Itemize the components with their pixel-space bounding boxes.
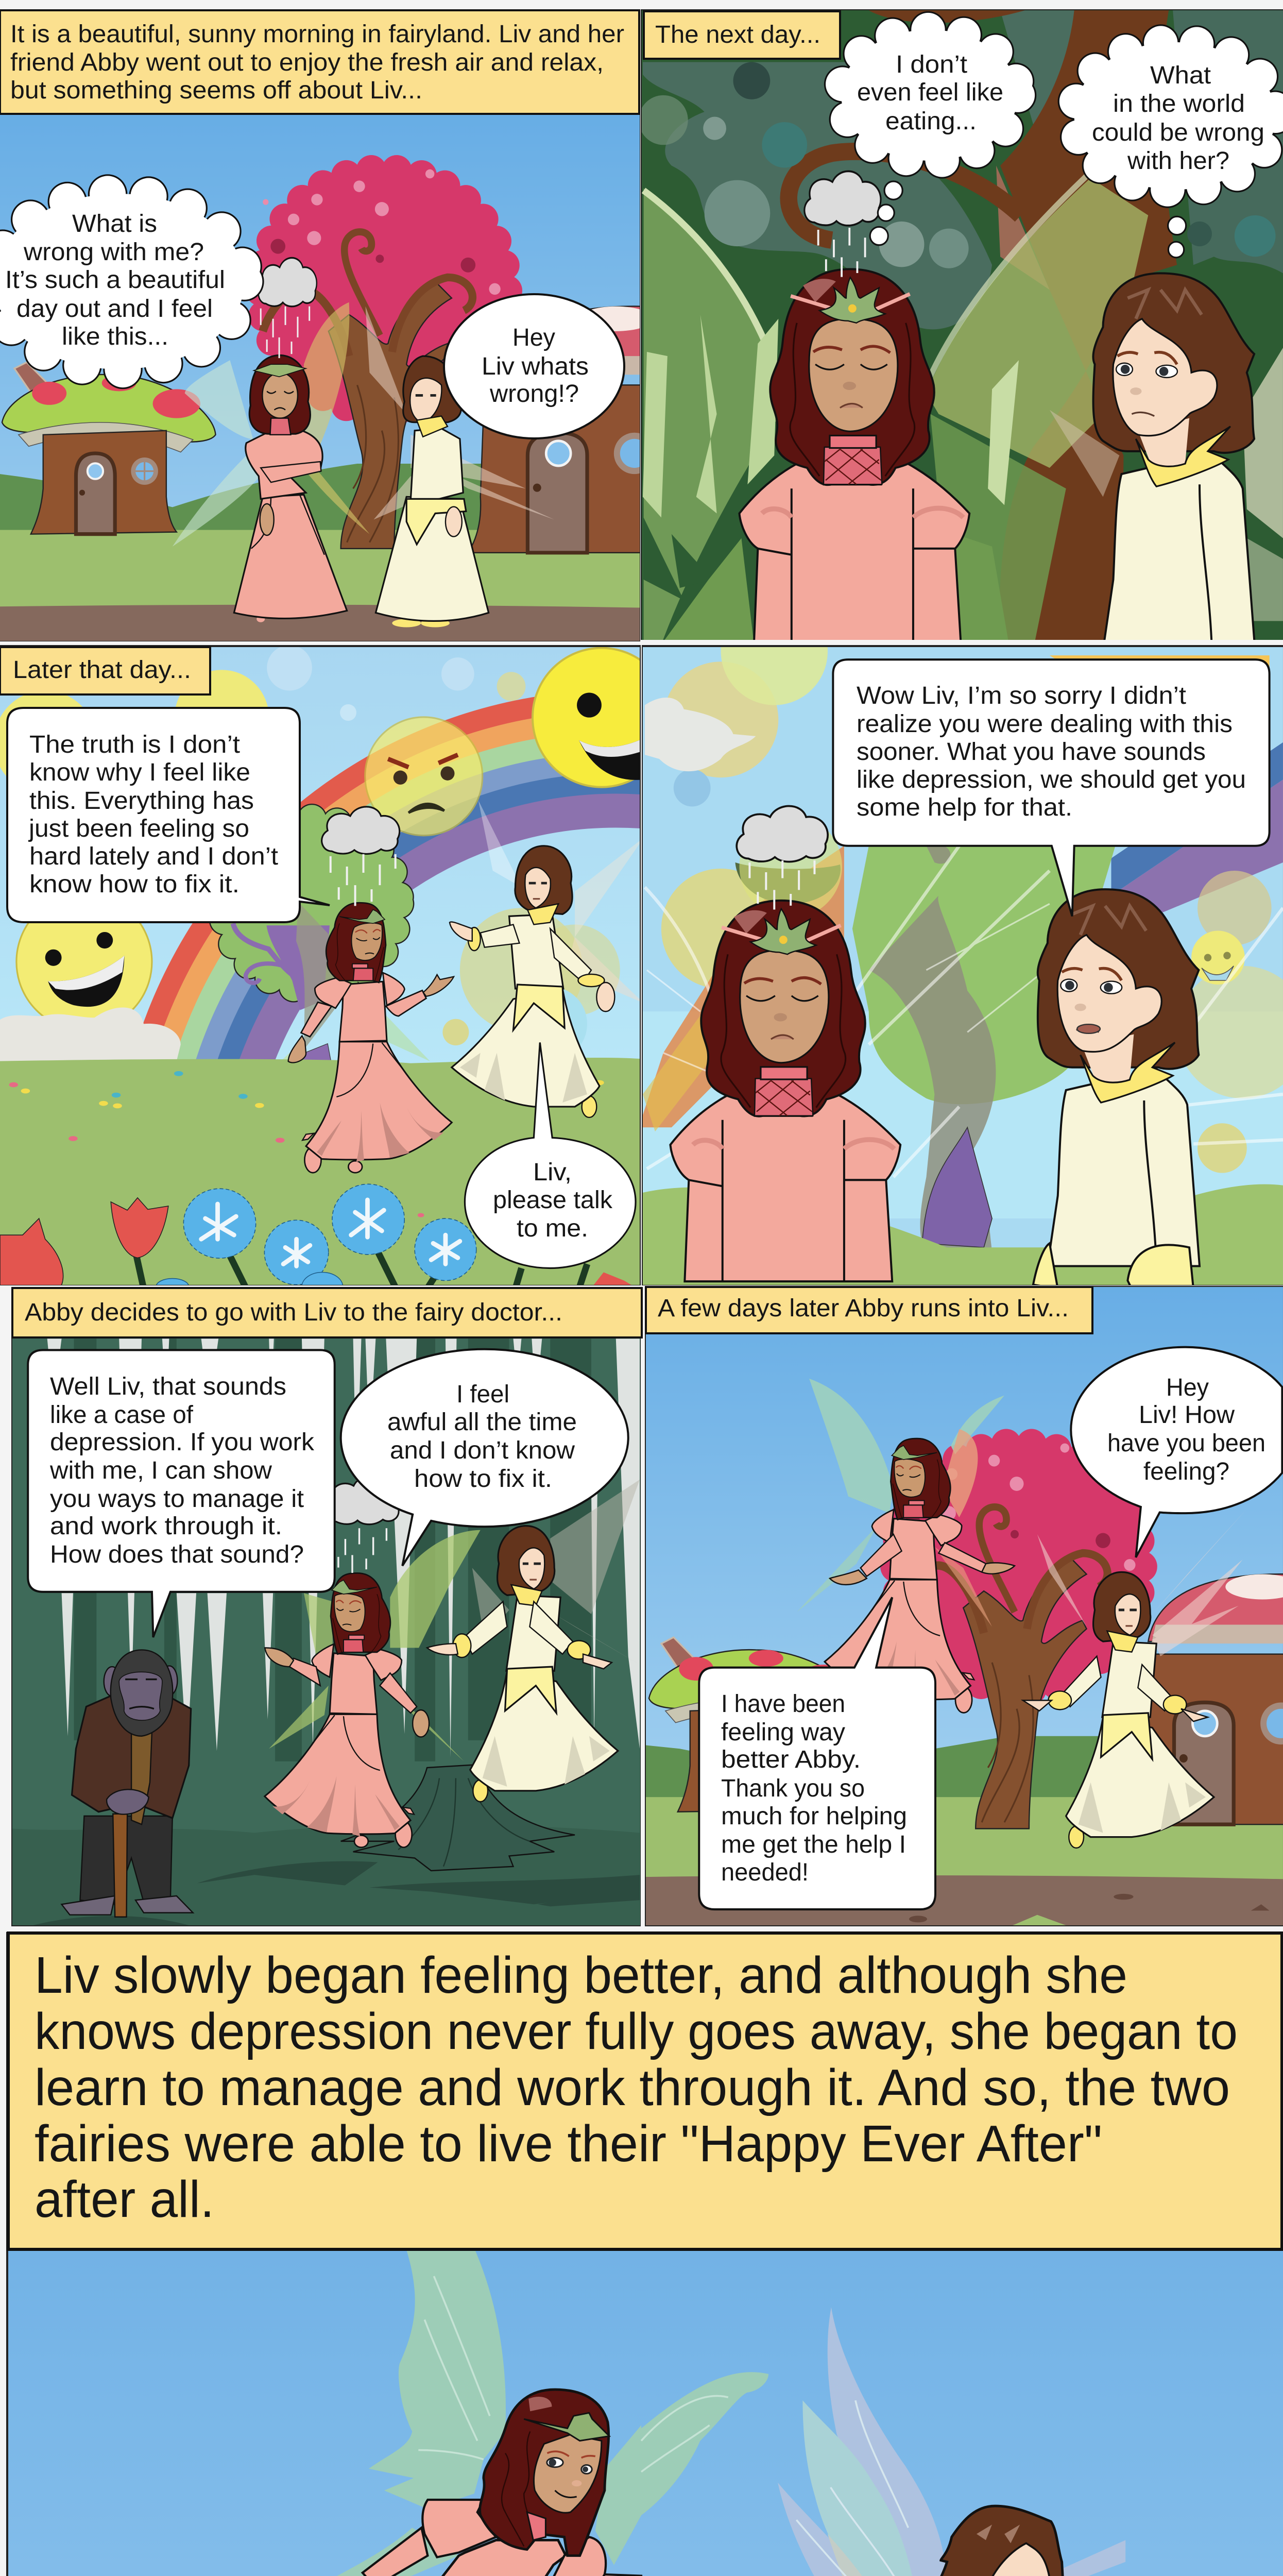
panel 5: fairy doctor <box>0 1278 644 1937</box>
wings: Abby final <box>675 2307 1125 2576</box>
doctor: old ape with cane <box>62 1650 193 1917</box>
caption: ending narration <box>8 1933 1282 2249</box>
thought bubble: Liv not eating: eating... <box>885 108 977 135</box>
speech box: doctor: depression. If you work <box>50 1429 315 1456</box>
flowers <box>0 1184 637 1301</box>
wings: Liv panel 6 <box>797 1379 1004 1627</box>
thought bubble: Liv: wrong with me? <box>23 239 204 266</box>
speech box: doctor: you ways to manage it <box>50 1485 304 1513</box>
figure: Liv floating panel 3 <box>288 903 454 1173</box>
speech box: doctor: like a case of <box>50 1401 194 1429</box>
speech box: doctor <box>28 1350 335 1637</box>
thought bubble: Liv: like this... <box>62 323 168 350</box>
thought bubble: Abby wondering: with her? <box>1127 147 1229 175</box>
speech box: Liv explains <box>7 708 330 922</box>
thought bubble: Liv not eating: I don’t <box>896 51 967 78</box>
speech bubble: Abby asks: Hey <box>1166 1374 1209 1401</box>
speech box: Liv thanks Abby: needed! <box>721 1859 809 1886</box>
figure: Abby floating panel 3 <box>450 800 644 1117</box>
panel 7: happy ending <box>6 1932 1283 2576</box>
speech box: Abby realizes: sooner. What you have sounds <box>857 738 1206 766</box>
wing: Liv right final <box>641 2372 768 2515</box>
wings: Abby panel 2 <box>1050 348 1283 621</box>
panel 4: Abby responds <box>639 598 1283 1289</box>
figure: Abby floating panel 5 <box>427 1480 640 1802</box>
caption: ending narration: after all. <box>35 2171 214 2228</box>
speech box: Liv explains: know why I feel like <box>29 759 250 786</box>
caption: The next day <box>644 11 840 59</box>
speech box: Abby realizes <box>833 659 1270 916</box>
speech bubble: Abby asks: have you been <box>1107 1430 1265 1457</box>
thought bubble: Liv: It’s such a beautiful <box>5 266 225 294</box>
speech box: Liv thanks Abby <box>699 1597 935 1909</box>
caption: Later that day: Later that day... <box>13 656 191 684</box>
thought bubble: Abby wondering: What <box>1150 62 1211 89</box>
speech bubble: Abby <box>444 294 624 438</box>
figure: Liv standing <box>173 302 369 622</box>
rain cloud: panel 2 <box>805 171 881 277</box>
figure: Abby standing <box>366 307 554 627</box>
caption: a few days later: A few days later Abby runs into Liv... <box>658 1295 1069 1322</box>
speech box: Abby realizes: some help for that. <box>857 794 1072 821</box>
caption: ending narration: fairies were able to live their "Happy Ever After" <box>35 2115 1102 2173</box>
rain cloud: panel 3 <box>322 807 400 906</box>
speech bubble: Liv feels awful: how to fix it. <box>414 1465 552 1493</box>
speech bubble: Liv feels awful: and I don’t know <box>390 1437 575 1464</box>
speech bubble: Abby: Hey <box>512 324 555 351</box>
figure: Liv floating panel 5 <box>265 1530 481 1848</box>
speech box: Liv thanks Abby: Thank you so <box>721 1775 865 1802</box>
caption: opening narration: but something seems off about Liv... <box>10 77 422 104</box>
figure: Liv close-up panel 4 <box>670 901 900 1281</box>
thought bubble: Liv not eating <box>841 30 1018 245</box>
panel 2: the next day <box>639 0 1283 650</box>
caption: ending narration: learn to manage and work through it. And so, the two <box>35 2059 1230 2116</box>
figure: Abby final <box>710 2506 1185 2576</box>
caption: The next day: The next day... <box>655 21 820 48</box>
figure: Abby close-up <box>1093 273 1255 650</box>
speech box: doctor: with me, I can show <box>49 1457 272 1484</box>
wings overlay: panel 4 <box>645 846 1283 1177</box>
caption: doctor visit: Abby decides to go with Liv to the fairy doctor... <box>25 1299 562 1326</box>
speech bubble: Abby: Liv whats <box>482 353 589 380</box>
speech box: doctor: Well Liv, that sounds <box>50 1373 286 1400</box>
speech bubble: Liv feels awful: awful all the time <box>387 1409 577 1436</box>
speech bubble: Abby: wrong!? <box>489 380 579 408</box>
speech box: Liv thanks Abby: better Abby. <box>721 1746 861 1773</box>
thought bubble: Liv not eating: even feel like <box>857 79 1003 106</box>
figure: Liv final <box>229 2389 641 2576</box>
wings: Liv panel 2 <box>643 176 1148 650</box>
wings: Liv final <box>220 2248 641 2576</box>
caption: a few days later <box>646 1287 1092 1333</box>
speech bubble: Abby asks: Liv! How <box>1139 1401 1235 1429</box>
speech box: doctor: and work through it. <box>50 1513 282 1540</box>
speech box: Liv explains: just been feeling so <box>28 815 249 842</box>
speech bubble: Liv feels awful <box>341 1349 628 1566</box>
speech bubble: Abby please talk: please talk <box>493 1187 613 1214</box>
speech bubble: Abby asks <box>1071 1347 1282 1557</box>
speech box: Liv thanks Abby: me get the help I <box>721 1831 906 1858</box>
rain cloud: panel 5 <box>327 1477 400 1573</box>
thought bubble: Liv <box>0 194 244 369</box>
speech bubble: Abby please talk: to me. <box>517 1215 588 1242</box>
thought bubble: Abby wondering <box>1074 42 1276 258</box>
figure: Abby floating panel 6 <box>1023 1509 1247 1848</box>
speech box: Liv explains: know how to fix it. <box>29 871 240 898</box>
speech box: Liv thanks Abby: much for helping <box>721 1803 907 1830</box>
caption: ending narration: Liv slowly began feeling better, and although she <box>35 1946 1127 2004</box>
caption: ending narration: knows depression never fully goes away, she began to <box>35 2003 1238 2060</box>
rain cloud: panel 1 <box>259 258 317 358</box>
speech box: Abby realizes: like depression, we should get you <box>857 766 1246 793</box>
speech bubble: Liv feels awful: I feel <box>456 1381 509 1408</box>
panel 1: sunny morning <box>0 9 655 650</box>
speech box: Liv explains: hard lately and I don’t <box>29 843 278 870</box>
rain cloud: panel 4 <box>737 806 828 910</box>
panel 3: later that day <box>0 639 1108 1694</box>
speech bubble: Abby asks: feeling? <box>1143 1458 1229 1485</box>
speech box: Liv explains: The truth is I don’t <box>29 731 240 758</box>
speech box: Abby realizes: Wow Liv, I’m so sorry I didn’t <box>857 682 1186 709</box>
thought bubble: Abby wondering: could be wrong <box>1092 119 1264 146</box>
speech box: doctor: How does that sound? <box>50 1541 304 1568</box>
panel 6: a few days later <box>639 1278 1283 1937</box>
thought bubble: Abby wondering: in the world <box>1113 90 1245 117</box>
speech box: Liv thanks Abby: feeling way <box>721 1719 845 1746</box>
speech box: Abby realizes: realize you were dealing with this <box>857 710 1233 738</box>
figure: Abby close-up panel 4 <box>1033 889 1200 1289</box>
caption: doctor visit <box>12 1288 642 1337</box>
speech bubble: Abby please talk: Liv, <box>533 1159 572 1186</box>
figure: Liv close-up <box>739 269 969 650</box>
speech box: Liv thanks Abby: I have been <box>721 1690 845 1718</box>
speech bubble: Abby please talk <box>465 1043 636 1268</box>
caption: Later that day <box>0 647 210 694</box>
thought bubble: Liv: What is <box>72 210 157 238</box>
caption: opening narration: friend Abby went out to enjoy the fresh air and relax, <box>10 49 604 76</box>
speech box: Liv explains: this. Everything has <box>29 787 254 815</box>
caption: opening narration: It is a beautiful, sunny morning in fairyland. Liv and her <box>10 21 624 48</box>
figure: Liv floating panel 6 <box>825 1438 1015 1713</box>
thought bubble: Liv: day out and I feel <box>16 295 213 323</box>
caption: opening narration <box>0 10 639 114</box>
